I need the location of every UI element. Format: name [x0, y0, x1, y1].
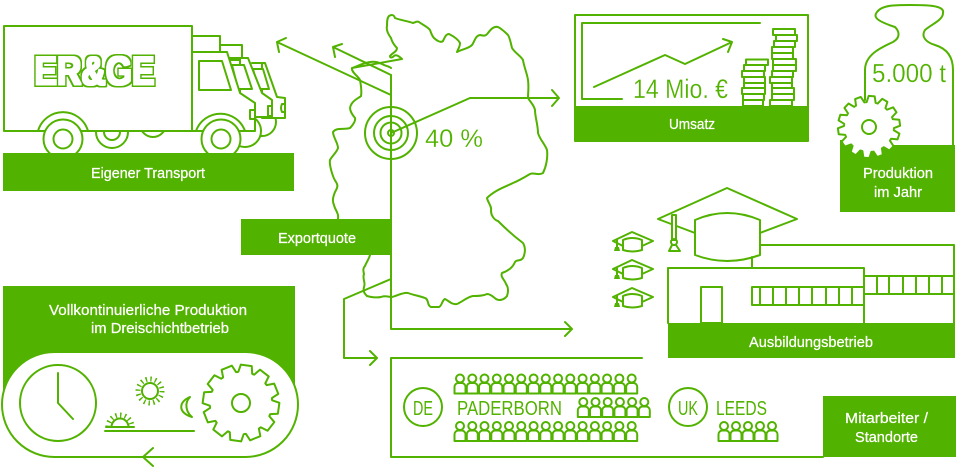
icon: truck convoy [4, 26, 285, 158]
panel: Vollkontinuierliche Produktion [2, 286, 298, 466]
icons: small mortarboards [613, 232, 653, 308]
icon: clock [20, 365, 96, 441]
upper window band [864, 276, 954, 294]
map of Germany [330, 15, 547, 307]
people row: Paderborn top [454, 374, 637, 394]
building outline [668, 245, 954, 323]
badge: UK [669, 388, 707, 426]
heading line two: im Dreischichtbetrieb [91, 320, 229, 337]
people row: Leeds [718, 422, 778, 441]
panel: Ausbildungsbetrieb [658, 188, 955, 358]
door [701, 287, 722, 323]
caption line two: im Jahr [874, 184, 922, 201]
caption bar [840, 140, 955, 212]
caption: Ausbildungsbetrieb [749, 334, 873, 351]
cycle arrow [143, 448, 153, 466]
icon: coin stacks [742, 29, 797, 106]
caption line two: Standorte [855, 429, 918, 446]
icon: mortarboard on building [658, 188, 797, 261]
caption: Umsatz [669, 116, 715, 133]
panel: Mitarbeiter / Standorte [391, 358, 956, 457]
UK label: UK [678, 398, 698, 420]
icon: target [365, 107, 417, 159]
caption bar [823, 396, 956, 457]
cycle pill [2, 352, 298, 457]
revenue value: 14 Mio. € [633, 74, 728, 104]
location: Leeds: LEEDS [716, 398, 767, 420]
panel: Exportquote [241, 219, 391, 255]
panel: Produktion im Jahr [838, 5, 955, 212]
panel: Umsatz [575, 15, 809, 141]
icon: gear [202, 364, 280, 442]
people row: Paderborn middle [578, 398, 650, 417]
logo lettering: ER&GE [34, 50, 154, 94]
icon: weight [865, 5, 953, 146]
export percentage: 40 % [425, 125, 483, 153]
people row: Paderborn bottom [454, 422, 637, 441]
trend arrow [594, 39, 732, 87]
caption: Eigener Transport [91, 165, 206, 182]
icon: gear [838, 96, 900, 158]
panel: Exportquote: Exportquote [278, 230, 356, 247]
icon: sunrise [105, 415, 194, 431]
DE label: DE [413, 398, 433, 420]
panel: Eigener Transport [3, 26, 294, 191]
caption bar [3, 153, 294, 191]
caption: Produktion [863, 165, 933, 182]
badge: DE [404, 388, 442, 426]
location: Paderborn: PADERBORN [457, 398, 562, 420]
chart axes [582, 23, 760, 99]
icon: sun [138, 379, 162, 403]
caption: Mitarbeiter / [845, 410, 929, 427]
icon: moon [181, 397, 192, 417]
heading: Vollkontinuierliche Produktion [49, 302, 247, 319]
caption bar [668, 323, 955, 358]
window band [752, 287, 864, 305]
export arrows [277, 38, 572, 365]
weight value: 5.000 t [872, 58, 947, 88]
